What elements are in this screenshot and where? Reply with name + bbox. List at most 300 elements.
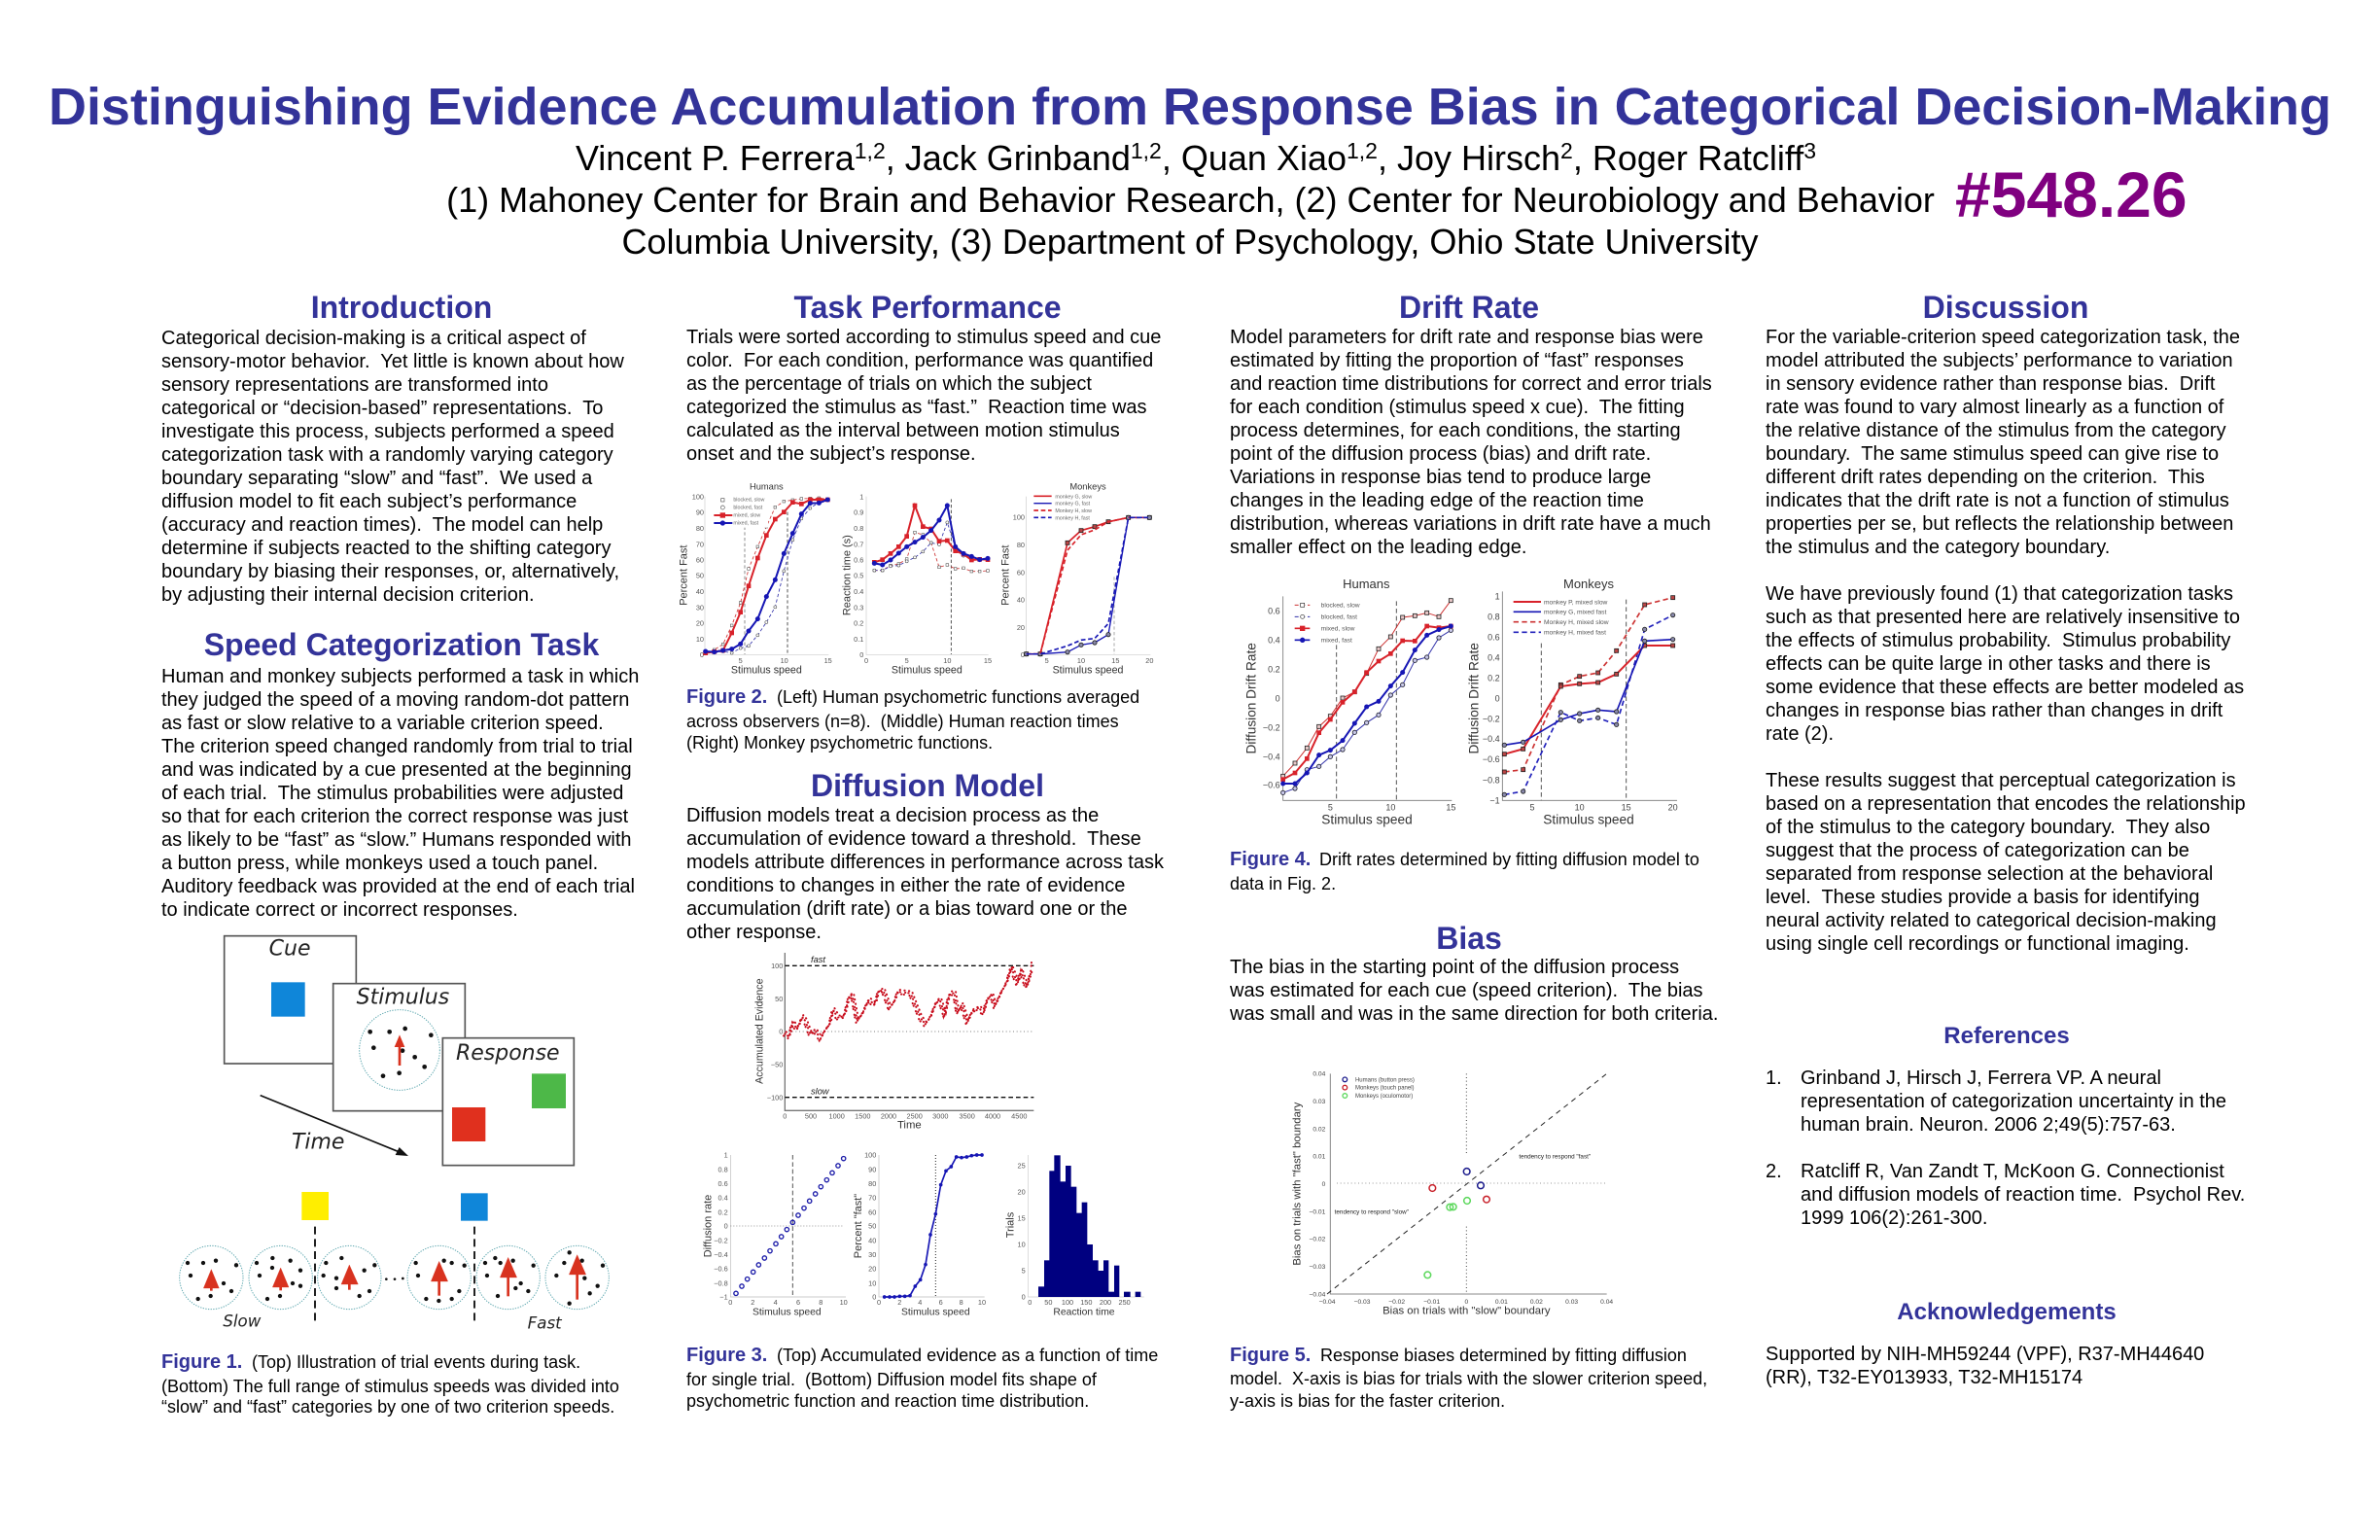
chart: percent fast fit: 40 (868, 1236, 876, 1244)
chart: monkeys drift rate: monkey H, mixed fast (1544, 630, 1606, 637)
chart: reaction time histogram: 250 (1119, 1298, 1131, 1307)
chart: humans percent fast: mixed, slow (733, 513, 760, 519)
chart: humans drift rate: mixed, fast (1321, 638, 1352, 645)
chart: monkeys percent fast: monkey H, fast (1055, 515, 1090, 521)
chart: humans percent fast: Percent Fast (679, 545, 690, 606)
chart: monkeys drift rate: Stimulus speed (1543, 812, 1634, 826)
figure 3 top: accumulated evidence chart (753, 953, 1033, 1132)
chart: diffusion rate: 0.4 (718, 1194, 728, 1203)
authors and affiliations: 1,2 (1131, 138, 1162, 163)
chart: percent fast fit: 80 (868, 1179, 876, 1188)
stimulus screen: Stimulus (357, 985, 449, 1009)
text block: introduction: (accuracy and reaction times). The model can help (161, 514, 603, 536)
figure 3 top: accumulated evidence chart: 3000 (932, 1111, 948, 1120)
heading: introduction: Introduction (311, 290, 492, 325)
text block: introduction: Categorical decision-making is a critical aspect of (161, 328, 586, 349)
figure 3 top: accumulated evidence chart: 4500 (1011, 1111, 1027, 1120)
text block: discussion: some evidence that these effects are better modeled as (1766, 677, 2244, 698)
chart: humans reaction time: 5 (905, 656, 909, 665)
chart: monkeys percent fast: 20 (1017, 623, 1025, 632)
text block: discussion: based on a representation that encodes the relationship (1766, 793, 2246, 815)
figure 2 caption (686, 686, 1139, 752)
chart: humans drift rate: −0.2 (1263, 722, 1280, 732)
chart: diffusion rate: 0.6 (718, 1179, 728, 1188)
text block: discussion: effects can be quite large in other tasks and there is (1766, 653, 2211, 675)
text block: introduction: categorization task with a randomly varying category (161, 444, 613, 466)
figure 3 bottom: model fit charts (703, 1151, 1144, 1317)
chart: diffusion rate: 10 (840, 1298, 848, 1307)
arrow: time: Time (292, 1131, 344, 1155)
chart: monkeys percent fast: monkey G, slow (1055, 494, 1092, 500)
text block: discussion: rate (2). (1766, 723, 1834, 745)
text block: drift rate: point of the diffusion process (bias) and drift rate. (1230, 443, 1651, 465)
text block: discussion: the relative distance of the stimulus from the category (1766, 420, 2226, 441)
figure 3 top: accumulated evidence chart: −50 (771, 1061, 783, 1069)
text block: diffusion model: other response. (686, 922, 822, 943)
figure 5: bias scatter chart (1291, 1071, 1613, 1317)
figure 5 caption: Figure 5. (1230, 1345, 1311, 1366)
chart: diffusion rate: 8 (819, 1298, 822, 1307)
text block: discussion: such as that presented here are relatively insensitive to (1766, 607, 2240, 628)
text block: diffusion model: accumulation of evidence toward a threshold. These (686, 828, 1141, 850)
figure 3 top: accumulated evidence chart: 0 (783, 1111, 787, 1120)
text block: task performance: categorized the stimulus as “fast.” Reaction time was (686, 397, 1147, 418)
axis tick labels: 0.02 (1312, 1126, 1326, 1133)
text block: bias: The bias in the starting point of the diffusion process (1230, 957, 1679, 978)
text block: discussion: the stimulus and the category boundary. (1766, 537, 2110, 558)
chart: diffusion rate: −0.6 (714, 1265, 728, 1274)
text block: acknowledgements: Supported by NIH-MH59244 (VPF), R37-MH44640 (1766, 1344, 2204, 1365)
figure 2 caption: (Right) Monkey psychometric functions. (686, 733, 993, 752)
heading: speed categorization task: Speed Categorization Task (204, 627, 600, 662)
text block: discussion: the effects of stimulus probability. Stimulus probability (1766, 630, 2230, 651)
authors and affiliations: 3 (1803, 138, 1816, 163)
legend: Monkeys (oculomotor) (1355, 1094, 1413, 1100)
legend (1343, 1077, 1415, 1100)
text block: speed categorization task: The criterion speed changed randomly from trial to trial (161, 736, 633, 757)
chart: percent fast fit: 10 (868, 1278, 876, 1287)
chart: monkeys percent fast: Monkey H, slow (1055, 508, 1092, 514)
axis tick labels: −0.03 (1354, 1299, 1371, 1306)
authors and affiliations: Vincent P. Ferrera (576, 138, 855, 178)
chart: monkeys drift rate (1467, 577, 1678, 826)
chart: humans drift rate: −0.6 (1263, 781, 1280, 790)
figure 5 caption: model. X-axis is bias for trials with the slower criterion speed, (1230, 1369, 1707, 1388)
chart: humans drift rate: blocked, fast (1321, 614, 1357, 621)
panel: introduction (161, 290, 624, 606)
panel: diffusion model (686, 768, 1165, 943)
chart: percent fast fit: 2 (897, 1298, 901, 1307)
text block: introduction: categorical or “decision-based” representations. To (161, 398, 603, 419)
chart: monkeys drift rate: 0.8 (1488, 612, 1500, 621)
axis tick labels: −0.02 (1309, 1237, 1326, 1243)
text block: discussion: in sensory evidence rather than response bias. Drift (1766, 373, 2216, 395)
figure 5: bias scatter chart: tendency to respond "fast" (1519, 1154, 1591, 1161)
figure 2 caption: (Left) Human psychometric functions averaged (777, 687, 1139, 707)
chart: monkeys percent fast: 15 (1111, 656, 1119, 665)
chart: diffusion rate: 0.2 (718, 1208, 728, 1216)
chart: humans percent fast: 5 (739, 656, 743, 665)
axis tick labels: 0 (1464, 1299, 1468, 1306)
figure 1: task illustration (180, 936, 609, 1333)
text block: references: 2. (1766, 1161, 1782, 1182)
chart: humans drift rate: Humans (1343, 577, 1390, 591)
chart: diffusion rate: 0 (724, 1222, 728, 1231)
axis tick labels: −0.04 (1309, 1291, 1326, 1298)
chart: percent fast fit: 70 (868, 1194, 876, 1203)
chart: humans percent fast: 50 (696, 572, 704, 580)
text block: discussion: For the variable-criterion speed categorization task, the (1766, 327, 2240, 348)
chart: monkeys drift rate: 0.6 (1488, 632, 1500, 642)
chart: diffusion rate: 0.8 (718, 1165, 728, 1173)
text block: references: Ratcliff R, Van Zandt T, McKoon G. Connectionist (1801, 1161, 2224, 1182)
text block: discussion: changes in response bias rather than changes in drift (1766, 700, 2223, 721)
data points (1424, 1169, 1489, 1278)
figure 1 caption: (Top) Illustration of trial events during task. (252, 1352, 580, 1372)
text block: diffusion model (686, 805, 1165, 943)
text block: speed categorization task: they judged the speed of a moving random-dot pattern (161, 689, 629, 711)
chart: humans reaction time: 15 (984, 656, 992, 665)
chart: monkeys drift rate: −0.6 (1483, 754, 1500, 764)
chart: humans percent fast: Humans (750, 481, 784, 491)
text block: introduction: diffusion model to fit each subject’s performance (161, 491, 577, 512)
chart: monkeys drift rate: 0 (1495, 693, 1500, 703)
chart: monkeys drift rate: 5 (1529, 802, 1534, 812)
speed labels: Fast (528, 1314, 563, 1333)
chart: humans percent fast: 80 (696, 524, 704, 533)
text block: acknowledgements: (RR), T32-EY013933, T32-MH15174 (1766, 1367, 2082, 1388)
chart: percent fast fit: 100 (864, 1151, 876, 1160)
axis tick labels: 0.03 (1565, 1299, 1578, 1306)
figure 3 caption: psychometric function and reaction time distribution. (686, 1391, 1089, 1411)
chart: monkeys percent fast: 10 (1077, 656, 1085, 665)
text block: task performance: color. For each condition, performance was quantified (686, 350, 1153, 371)
chart: reaction time histogram: 0 (1022, 1293, 1026, 1302)
chart: reaction time histogram (1004, 1155, 1144, 1317)
chart: percent fast fit: 8 (960, 1298, 963, 1307)
chart: humans percent fast: 0 (700, 650, 704, 659)
text block: references (1766, 1068, 2245, 1229)
chart: monkeys percent fast (1000, 481, 1153, 676)
text block: speed categorization task: so that for each criterion the correct response was just (161, 806, 629, 827)
text block: speed categorization task: a button press, while monkeys used a touch panel. (161, 853, 598, 874)
chart: humans percent fast (679, 481, 832, 676)
chart: humans drift rate (1244, 577, 1455, 826)
authors and affiliations: Columbia University, (3) Department of Psychology, Ohio State University (621, 222, 1759, 262)
chart: monkeys drift rate: −0.4 (1483, 734, 1500, 744)
authors and affiliations: 1,2 (855, 138, 886, 163)
chart: diffusion rate: 4 (774, 1298, 778, 1307)
authors and affiliations: , Roger Ratcliff (1573, 138, 1804, 178)
chart: humans reaction time: 0.4 (854, 587, 863, 596)
text block: discussion: using single cell recordings or functional imaging. (1766, 933, 2189, 955)
chart: humans drift rate: 0.4 (1268, 636, 1280, 646)
chart: humans percent fast: blocked, fast (733, 506, 763, 511)
figure 5 caption: Response biases determined by fitting diffusion (1320, 1346, 1687, 1365)
text block: discussion (1766, 327, 2246, 955)
chart: monkeys drift rate: 20 (1668, 802, 1678, 812)
chart: humans drift rate: 15 (1446, 802, 1455, 812)
red evidence trace (784, 962, 1032, 1040)
figure 1 caption: (Bottom) The full range of stimulus speeds was divided into (161, 1377, 619, 1396)
chart: monkeys percent fast: monkey G, fast (1055, 502, 1091, 508)
chart: humans percent fast: 15 (824, 656, 832, 665)
text block: introduction: by adjusting their internal decision criterion. (161, 584, 535, 606)
chart: reaction time histogram: Reaction time (1053, 1307, 1115, 1317)
figure 5 caption: y-axis is bias for the faster criterion. (1230, 1391, 1505, 1411)
text block: task performance: Trials were sorted according to stimulus speed and cue (686, 327, 1161, 348)
text block: diffusion model: accumulation (drift rate) or a bias toward one or the (686, 898, 1128, 920)
chart: humans reaction time: 0.6 (854, 556, 863, 565)
text block: diffusion model: Diffusion models treat a decision process as the (686, 805, 1099, 826)
chart: percent fast fit: 6 (939, 1298, 943, 1307)
chart: diffusion rate: 6 (796, 1298, 800, 1307)
title: Distinguishing Evidence Accumulation from Response Bias in Categorical Decision-Making (49, 78, 2331, 136)
chart: reaction time histogram: 5 (1022, 1266, 1026, 1275)
chart: reaction time histogram: 15 (1018, 1213, 1026, 1222)
chart: percent fast fit: 0 (877, 1298, 881, 1307)
response screen (442, 1038, 574, 1166)
chart: humans reaction time: 10 (943, 656, 951, 665)
chart: diffusion rate: Diffusion rate (703, 1195, 715, 1257)
chart: humans reaction time: Reaction time (s) (841, 535, 853, 615)
chart: monkeys percent fast: 80 (1017, 541, 1025, 549)
text block: discussion: level. These studies provide a basis for identifying (1766, 887, 2200, 908)
figure 3 caption: for single trial. (Bottom) Diffusion model fits shape of (686, 1370, 1098, 1389)
text block: drift rate: for each condition (stimulus speed x cue). The fitting (1230, 397, 1685, 418)
chart: humans drift rate: 0 (1276, 693, 1280, 703)
chart: percent fast fit: 4 (918, 1298, 922, 1307)
text block: references: 1999 106(2):261-300. (1801, 1208, 1987, 1229)
legend: Humans (button press) (1355, 1077, 1415, 1083)
chart: percent fast fit: Stimulus speed (901, 1307, 970, 1317)
text block: introduction (161, 328, 624, 606)
text block: bias (1229, 957, 1718, 1025)
chart: monkeys drift rate: −0.8 (1483, 775, 1500, 785)
chart: reaction time histogram: 150 (1080, 1298, 1092, 1307)
text block: discussion: model attributed the subjects’ performance to variation (1766, 350, 2233, 371)
response screen: Response (456, 1041, 560, 1066)
chart: diffusion rate (703, 1151, 848, 1317)
chart: humans drift rate: 10 (1385, 802, 1395, 812)
text block: introduction: boundary separating “slow” and “fast”. We used a (161, 468, 593, 489)
figure 2 caption: Figure 2. (686, 686, 767, 708)
text block: discussion: neural activity related to categorical decision-making (1766, 910, 2217, 931)
text block: drift rate: estimated by fitting the proportion of “fast” responses (1230, 350, 1684, 371)
speed labels (223, 1312, 563, 1333)
heading: discussion: Discussion (1923, 290, 2088, 325)
figure 1 caption (161, 1351, 619, 1417)
chart: humans drift rate: 0.6 (1268, 607, 1280, 616)
chart: percent fast fit: 20 (868, 1265, 876, 1274)
chart: diffusion rate: 1 (724, 1151, 728, 1160)
chart: diffusion rate: −1 (719, 1293, 728, 1302)
axis tick labels: 0.01 (1312, 1154, 1326, 1161)
chart: reaction time histogram: 100 (1062, 1298, 1073, 1307)
text block: task performance: calculated as the interval between motion stimulus (686, 420, 1120, 441)
chart: humans reaction time: 1 (859, 492, 863, 501)
chart: humans percent fast: 40 (696, 587, 704, 596)
chart: percent fast fit: 10 (978, 1298, 986, 1307)
text block: speed categorization task: to indicate correct or incorrect responses. (161, 899, 518, 921)
poster number: #548.26 (1955, 158, 2188, 230)
text block: drift rate: changes in the leading edge of the reaction time (1230, 490, 1644, 511)
chart: monkeys percent fast: Percent Fast (1000, 545, 1012, 606)
text block: discussion: rate was found to vary almost linearly as a function of (1766, 397, 2224, 418)
text block: speed categorization task: as likely to be “fast” as “slow.” Humans responded with (161, 829, 632, 851)
chart: reaction time histogram: 200 (1100, 1298, 1111, 1307)
cue screen: Cue (269, 937, 310, 962)
axis tick labels: 0.03 (1312, 1099, 1326, 1105)
chart: percent fast fit (853, 1151, 986, 1317)
text block: discussion: properties per se, but reflects the relationship between (1766, 513, 2233, 535)
chart: humans drift rate: −0.4 (1263, 752, 1280, 761)
text block: speed categorization task (161, 666, 639, 921)
axis tick labels: 0.04 (1600, 1299, 1613, 1306)
text block: drift rate: process determines, for each conditions, the starting (1230, 420, 1681, 441)
authors and affiliations: 2 (1560, 138, 1573, 163)
chart: humans drift rate: Diffusion Drift Rate (1244, 643, 1259, 754)
chart: humans reaction time: Stimulus speed (892, 664, 962, 676)
text block: introduction: determine if subjects reacted to the shifting category (161, 538, 611, 559)
panel: discussion (1766, 290, 2246, 955)
stimulus screen (333, 984, 465, 1111)
text block: bias: was small and was in the same direction for both criteria. (1229, 1003, 1718, 1025)
chart: humans reaction time: 0.9 (854, 508, 863, 517)
chart: percent fast fit: Percent "fast" (853, 1194, 864, 1258)
heading: task performance: Task Performance (793, 290, 1062, 325)
chart: humans reaction time: 0 (864, 656, 868, 665)
figure 5: bias scatter chart: tendency to respond "slow" (1335, 1208, 1409, 1215)
chart: monkeys drift rate: Diffusion Drift Rate (1467, 643, 1482, 754)
chart: monkeys percent fast: 60 (1017, 568, 1025, 577)
chart: humans reaction time (841, 492, 992, 676)
axis tick labels: 0.01 (1495, 1299, 1508, 1306)
chart: monkeys percent fast: 100 (1013, 513, 1025, 522)
chart: percent fast fit: 50 (868, 1222, 876, 1231)
speed labels: Slow (223, 1312, 262, 1330)
axis tick labels: −0.04 (1319, 1299, 1336, 1306)
text block: bias: was estimated for each cue (speed criterion). The bias (1229, 980, 1703, 1001)
authors and affiliations: , Jack Grinband (886, 138, 1131, 178)
text block: speed categorization task: and was indicated by a cue presented at the beginning (161, 759, 632, 781)
figure 3 top: accumulated evidence chart: 50 (775, 995, 783, 1003)
chart: humans drift rate: blocked, slow (1321, 603, 1360, 610)
text block: task performance: onset and the subject’s response. (686, 443, 976, 465)
authors and affiliations (446, 138, 1935, 262)
chart: monkeys drift rate: 10 (1575, 802, 1585, 812)
figure 3 caption: (Top) Accumulated evidence as a function of time (777, 1346, 1158, 1365)
chart: humans percent fast: 60 (696, 556, 704, 565)
chart: diffusion rate: 2 (751, 1298, 754, 1307)
chart: percent fast fit: 60 (868, 1208, 876, 1216)
figure 5: bias scatter chart: Bias on trials with "slow" boundary (1382, 1306, 1551, 1317)
text block: speed categorization task: of each trial. The stimulus probabilities were adjusted (161, 783, 623, 804)
text block: references: representation of categorization uncertainty in the (1801, 1091, 2226, 1112)
authors and affiliations: 1,2 (1347, 138, 1378, 163)
text block: drift rate: smaller effect on the leading edge. (1230, 537, 1526, 558)
figure 5 caption (1230, 1345, 1707, 1411)
chart: reaction time histogram: 25 (1018, 1162, 1026, 1171)
figure 3 top: accumulated evidence chart: 3500 (960, 1111, 975, 1120)
chart: percent fast fit: 0 (872, 1293, 876, 1302)
chart: humans drift rate: Stimulus speed (1321, 812, 1413, 826)
text block: diffusion model: models attribute differences in performance across task (686, 852, 1165, 873)
chart: monkeys percent fast: 40 (1017, 596, 1025, 605)
chart: monkeys drift rate: 0.2 (1488, 673, 1500, 682)
chart: humans percent fast: 20 (696, 619, 704, 628)
cue screen (225, 936, 356, 1064)
chart: humans reaction time: 0.8 (854, 524, 863, 533)
chart: diffusion rate: Stimulus speed (752, 1307, 822, 1317)
axis tick labels: 0.04 (1312, 1071, 1326, 1078)
figure 2 caption: across observers (n=8). (Middle) Human reaction times (686, 712, 1119, 731)
text block: drift rate: distribution, whereas variations in drift rate have a much (1230, 513, 1711, 535)
figure 4 caption: data in Fig. 2. (1230, 874, 1336, 893)
chart: monkeys drift rate: monkey P, mixed slow (1544, 599, 1608, 606)
chart: humans percent fast: mixed, fast (733, 521, 759, 527)
axis tick labels: −0.03 (1309, 1264, 1326, 1271)
text block: drift rate: and reaction time distributions for correct and error trials (1230, 373, 1712, 395)
chart: humans percent fast: 10 (696, 635, 704, 644)
figure 3 top: accumulated evidence chart: fast (811, 955, 825, 964)
text block: introduction: sensory representations are transformed into (161, 374, 548, 396)
heading: references: References (1943, 1023, 2070, 1049)
chart: monkeys percent fast: 0 (1021, 650, 1025, 659)
chart: humans percent fast: 70 (696, 540, 704, 548)
text block: introduction: boundary by biasing their responses, or, alternatively, (161, 561, 619, 582)
figure 3 top: accumulated evidence chart: Accumulated Evidence (753, 978, 765, 1084)
chart: humans reaction time: 0.7 (854, 540, 863, 548)
chart: monkeys percent fast: Monkeys (1069, 481, 1106, 491)
figure 3 top: accumulated evidence chart: 2000 (881, 1111, 896, 1120)
axis tick labels: −0.01 (1309, 1208, 1326, 1215)
figure 3 caption: Figure 3. (686, 1345, 767, 1366)
panel: speed categorization task (161, 627, 639, 921)
chart: humans percent fast: Stimulus speed (731, 664, 802, 676)
chart: humans reaction time: 0 (859, 650, 863, 659)
text block: discussion: of the stimulus to the category boundary. They also (1766, 817, 2210, 838)
text block: references: 1. (1766, 1068, 1782, 1089)
text block: references: and diffusion models of reaction time. Psychol Rev. (1801, 1184, 2245, 1206)
text block: discussion: We have previously found (1) that categorization tasks (1766, 583, 2233, 605)
chart: humans reaction time: 0.1 (854, 635, 863, 644)
figure 3 top: accumulated evidence chart: 500 (805, 1111, 817, 1120)
figure 3 top: accumulated evidence chart: slow (811, 1087, 830, 1097)
figure 1 caption: Figure 1. (161, 1351, 242, 1373)
figure 2: psychometric charts (679, 481, 1153, 676)
panel: acknowledgements (1766, 1299, 2204, 1388)
text block: discussion: boundary. The same stimulus speed can give rise to (1766, 443, 2219, 465)
chart: monkeys drift rate: 15 (1622, 802, 1631, 812)
figure 4 caption: Figure 4. (1230, 849, 1311, 870)
authors and affiliations: , Quan Xiao (1162, 138, 1347, 178)
chart: reaction time histogram: Trials (1004, 1211, 1016, 1238)
panel: drift rate (1230, 290, 1712, 558)
figure 3 top: accumulated evidence chart: 1000 (829, 1111, 845, 1120)
axis tick labels: −0.02 (1388, 1299, 1405, 1306)
chart: monkeys drift rate: Monkey H, mixed slow (1544, 619, 1609, 626)
text block: references: Grinband J, Hirsch J, Ferrera VP. A neural (1801, 1068, 2161, 1089)
chart: diffusion rate: −0.2 (714, 1236, 728, 1244)
panel: references (1766, 1023, 2245, 1229)
text block: discussion: indicates that the drift rate is not a function of stimulus (1766, 490, 2229, 511)
chart: humans percent fast: 10 (781, 656, 788, 665)
figure 3 top: accumulated evidence chart: 0 (779, 1028, 783, 1036)
stimulus speed apertures (180, 1245, 609, 1310)
text block: drift rate: Variations in response bias tend to produce large (1230, 467, 1651, 488)
text block: speed categorization task: Auditory feedback was provided at the end of each trial (161, 876, 635, 897)
